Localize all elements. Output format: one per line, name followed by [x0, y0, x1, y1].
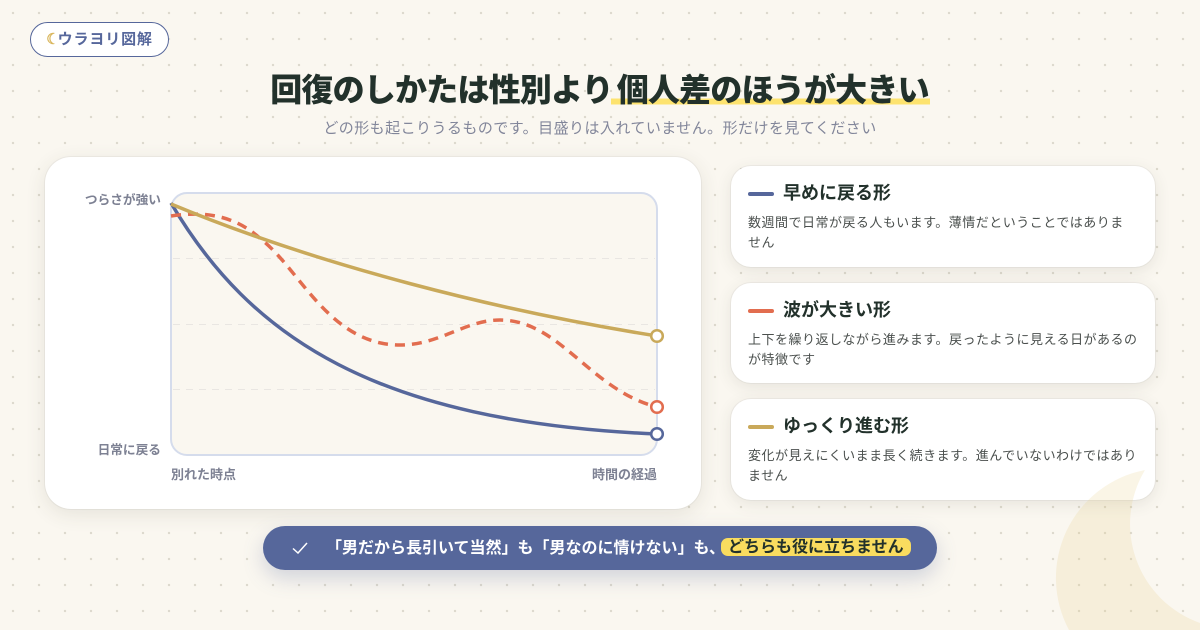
title: 回復のしかたは性別より個人差のほうが大きい	[270, 72, 929, 108]
decorative crescent moon	[1056, 470, 1200, 630]
card text: が特徴です	[748, 352, 815, 366]
legend swatch: coral	[748, 309, 774, 313]
panel: slow progress card	[731, 399, 1155, 500]
card text: 上下を繰り返しながら進みます。戻ったように見える日があるの	[748, 332, 1138, 346]
callout text	[326, 538, 911, 557]
x axis label: time passing: 時間の経過	[592, 467, 657, 482]
card text	[748, 332, 1138, 366]
x axis label: start: 別れた時点	[171, 467, 236, 482]
legend swatch: gold	[748, 425, 774, 429]
brand badge: ☾ウラヨリ図解	[46, 31, 153, 48]
callout text: 「男だから長引いて当然」も「男なのに情けない」も、	[326, 540, 725, 557]
legend swatch: blue	[748, 192, 774, 196]
card heading: 早めに戻る形	[783, 183, 891, 203]
curve: slow progress	[171, 204, 663, 342]
panel: large waves card	[731, 283, 1155, 383]
panel: recovery curves chart	[45, 157, 701, 509]
card text	[748, 448, 1137, 482]
card text: 変化が見えにくいまま長く続きます。進んでいないわけではあり	[748, 448, 1137, 462]
subtitle: どの形も起こりうるものです。目盛りは入れていません。形だけを見てください	[323, 120, 877, 137]
y axis label: strong: つらさが強い	[85, 193, 161, 207]
card text: 数週間で日常が戻る人もいます。薄情だということではありま	[748, 214, 1124, 230]
curve: large waves	[171, 214, 663, 413]
brand badge	[30, 22, 169, 57]
panel: quick recovery card	[731, 166, 1155, 267]
callout banner	[263, 526, 937, 570]
card heading: 波が大きい形	[783, 300, 891, 320]
card text: せん	[748, 234, 775, 250]
icon: check mark	[292, 542, 308, 554]
y axis label: back to daily life: 日常に戻る	[98, 443, 161, 457]
curve: quick recovery	[171, 203, 663, 440]
callout text: どちらも役に立ちません	[728, 539, 904, 556]
card text	[748, 214, 1124, 250]
line chart	[170, 192, 664, 456]
card heading: ゆっくり進む形	[783, 416, 909, 436]
card text: ません	[748, 468, 788, 482]
